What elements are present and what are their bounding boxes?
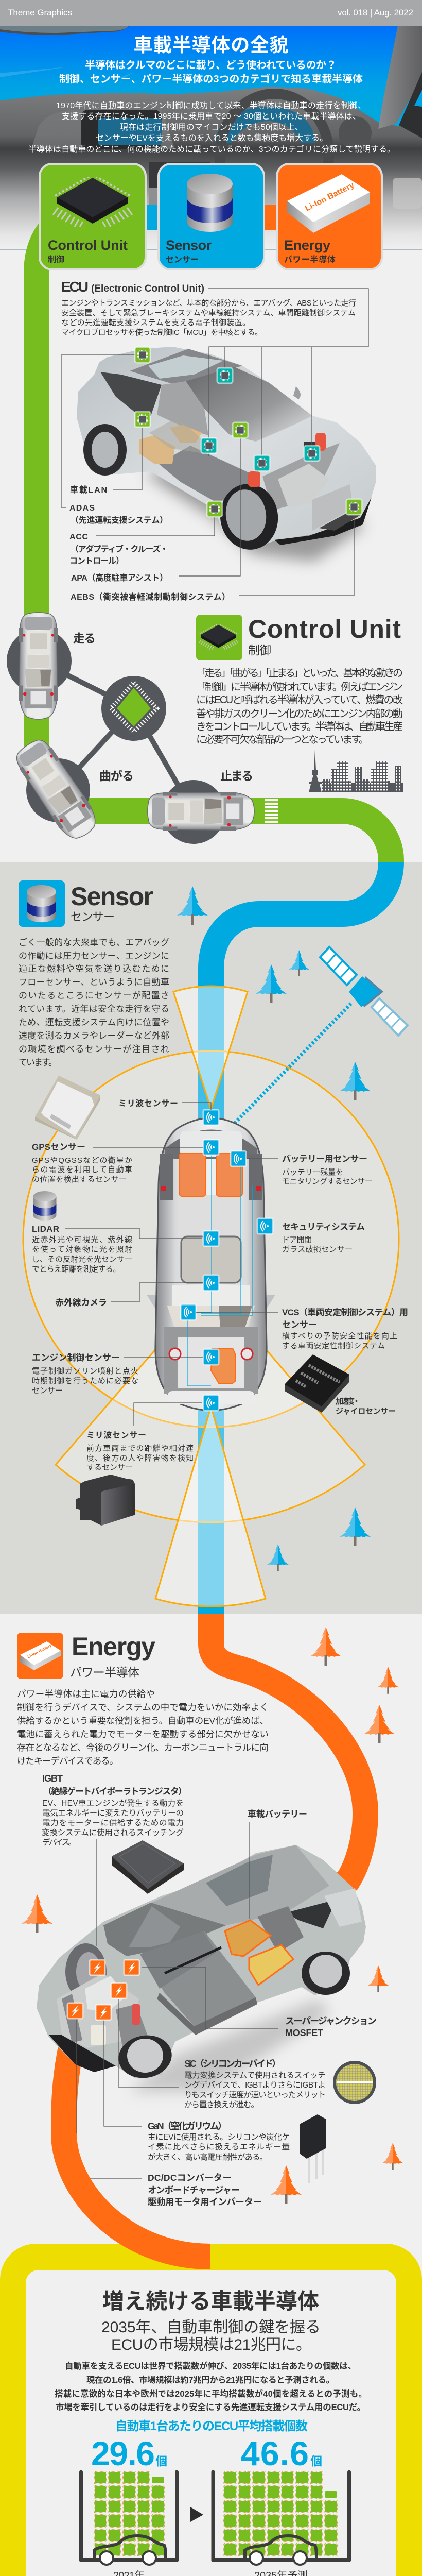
sensor text	[19, 938, 169, 1067]
sensor text: ごく一般的な大衆車でも、エアバッグ	[19, 938, 169, 947]
ECU system labels: AEBS（衝突被害軽減制動制御システム）	[71, 592, 230, 602]
label: GaN: GaN（窒化ガリウム）	[148, 2121, 227, 2131]
sensor markers	[181, 1110, 273, 1411]
energy icon: Li-Ion Battery	[27, 1643, 53, 1659]
road: green control section	[37, 217, 391, 862]
control unit text: 善や排ガスのクリーン化のためにエンジン内部の動	[196, 708, 403, 720]
subtitle	[59, 59, 363, 85]
GaN transistor	[300, 2114, 326, 2183]
ECU count value: 2021: 個	[155, 2454, 167, 2468]
label: super junction MOSFET: スーパージャンクション	[285, 2016, 377, 2026]
sensor text: ため、運転支援システム向けに位置や	[19, 1018, 169, 1027]
ECU description: マイクロプロセッサを使った制御IC「MCU」を中核とする。	[61, 328, 262, 337]
control unit icon	[196, 615, 242, 660]
category card: energy: パワー半導体	[284, 255, 336, 264]
label: SiC: 電力変換システムで使用されるスイッチ	[184, 2071, 326, 2080]
car cutaway: energy	[37, 1845, 366, 2092]
label: GPS sensor: GPSセンサー	[32, 1142, 85, 1152]
ECU description	[61, 299, 356, 337]
sensor text: の環境を調べるセンサーが注目され	[19, 1044, 169, 1054]
ECU container: 2035	[213, 2470, 349, 2565]
ECU system labels: 車載LAN	[70, 485, 107, 495]
car top view: sensor locations	[147, 1118, 275, 1411]
sensor text: れています。近年は安全な走行を守る	[19, 1004, 169, 1014]
category card: sensor	[159, 164, 264, 269]
market heading	[101, 2289, 321, 2353]
energy heading: Energy	[72, 1632, 155, 1661]
energy heading	[70, 1632, 155, 1679]
ECU heading	[61, 279, 204, 295]
label: rear millimeter wave sensor: 前方車両までの距離や相対速	[86, 1444, 194, 1453]
ECU description: 安全装置、そして緊急ブレーキシステムや車線維持システム、車間距離制御システム	[61, 308, 356, 317]
label: LiDAR: 近赤外光や可視光、紫外線	[32, 1235, 132, 1244]
connector lines: energy	[76, 1822, 278, 2178]
road links: blue and orange between cards	[146, 205, 277, 230]
sensor coverage: rear narrow fan	[155, 1406, 266, 1606]
subtitle: 制御、センサー、パワー半導体の3つのカテゴリで知る車載半導体	[59, 73, 363, 85]
header band: Theme Graphics	[8, 8, 72, 18]
market text	[55, 2361, 367, 2412]
label: battery sensor: バッテリー用センサー	[282, 1154, 367, 1164]
label: acceleration gyro sensor: 加速度・	[336, 1397, 360, 1406]
label: VCS sensor: 横すべりの予防安全性能を向上	[282, 1332, 397, 1341]
control unit text: 「制御」に半導体が使われています。例えばエンジン	[196, 681, 403, 693]
category card: energy	[277, 164, 382, 269]
label: SiC: りもスイッチ速度が速いといったメリット	[184, 2090, 326, 2099]
sensor coverage: front narrow fan	[173, 986, 248, 1109]
label: turn: 曲がる	[99, 769, 134, 783]
label: run: 走る	[73, 632, 96, 645]
label: DC/DC converter and others	[148, 2173, 262, 2207]
road: blue sensor section	[211, 862, 391, 1614]
sensor heading: センサー	[71, 910, 115, 923]
header band: vol. 018 | Aug. 2022	[338, 8, 413, 18]
label: SiC: から置き換えが進む。	[184, 2100, 259, 2109]
ECU system labels: （アダプティブ・クルーズ・	[71, 544, 168, 554]
label: IGBT: 電気エネルギーに変えたりバッテリーの	[42, 1808, 184, 1818]
sensor coverage: rear wide fan	[56, 1285, 365, 1522]
label: GaN: イ素に比べさらに扱えるエネルギー量	[148, 2142, 290, 2151]
car top view: stop	[148, 792, 254, 831]
label: battery sensor	[282, 1154, 373, 1186]
label: rear millimeter wave sensor: するセンサー	[86, 1463, 133, 1472]
car top view: turn	[11, 735, 102, 845]
label: engine control sensor: 電子制御ガソリン噴射と点火	[32, 1367, 138, 1376]
energy text: 制御を行うデバイスで、システムの中で電力をいかに効率よく	[17, 1702, 269, 1713]
energy text: 供給するかという重要な役割を担う。自動車のEV化が進めば、	[17, 1716, 269, 1726]
title: 車載半導体の全貌	[134, 35, 288, 56]
category card: energy: Li-Ion Battery	[304, 181, 356, 213]
label: security system	[282, 1222, 365, 1254]
energy text: 存在となるなど、今後のグリーン化、カーボンニュートラルに向	[17, 1742, 269, 1753]
ECU count chart title: 自動車1台あたりのECU平均搭載個数	[115, 2419, 308, 2433]
label: LiDAR: し、その反射光を光センサー	[32, 1255, 132, 1264]
radar module	[76, 1475, 135, 1526]
intro text: 支援する存在になった。1995年に乗用車で20 ～ 30個といわれた車載半導体は、	[62, 111, 361, 121]
label: GPS sensor: の位置を検出するセンサー	[32, 1175, 127, 1184]
label: battery sensor: モニタリングするセンサー	[282, 1177, 373, 1186]
label: GPS sensor: GPSやQGSSなどの衛星か	[32, 1156, 132, 1165]
SiC wafer	[333, 2061, 376, 2104]
label: GaN: 主にEVに使用される。シリコンや炭化ケ	[148, 2132, 290, 2142]
ECU description: などの先進運転支援システムを支える電子制御装置。	[61, 318, 250, 327]
growth arrow	[190, 2507, 203, 2522]
satellite	[320, 947, 408, 1036]
diagram: run turn stop network	[7, 629, 225, 844]
control unit text: 「走る」「曲がる」「止まる」といった、基本的な動きの	[196, 667, 403, 679]
label: VCS sensor: する車両安定性制御システム	[282, 1342, 385, 1350]
energy text: けたキーデバイスである。	[17, 1756, 118, 1766]
label: battery sensor: バッテリー残量を	[282, 1168, 343, 1177]
ECU system labels: ADAS	[69, 504, 95, 513]
energy icon	[17, 1633, 63, 1679]
crosswalk	[265, 800, 278, 822]
energy text	[17, 1689, 269, 1766]
sensor text: ています。	[19, 1058, 57, 1067]
label: LiDAR: LiDAR	[32, 1224, 59, 1234]
ECU count value: 2035: 個	[310, 2454, 322, 2468]
category card: sensor: Sensor	[166, 238, 212, 253]
label: IGBT: （絶縁ゲートバイポーラトランジスタ）	[43, 1786, 187, 1797]
label: IGBT: IGBT	[42, 1773, 63, 1784]
satellite signal line	[218, 1004, 351, 1140]
label: VCS sensor: VCS（車両安定制御システム）用	[282, 1308, 408, 1317]
ECU system labels: コントロール）	[69, 556, 124, 566]
control unit text: にはECUと呼ばれる半導体が入っていて、燃費の改	[196, 694, 403, 706]
label: DC/DC converter and others: DC/DCコンバーター	[148, 2173, 232, 2183]
control unit text: に必要不可欠な部品の一つとなっています。	[196, 734, 369, 745]
label: security system: ガラス破損センサー	[282, 1245, 353, 1254]
sensor text: 速度を測るカメラやレーダーなど外部	[19, 1031, 169, 1041]
label: SiC: SiC（シリコンカーバイド）	[184, 2059, 281, 2069]
intro text: センサーやEVを支えるものを入れると数も集積度も増大する。	[96, 133, 328, 143]
energy text: 電池に蓄えられた電力でモーターを駆動する部分に欠かせない	[17, 1729, 269, 1739]
sensor heading: Sensor	[71, 882, 153, 911]
category card: control unit	[40, 164, 146, 269]
label: engine control sensor: エンジン制御センサー	[32, 1353, 120, 1363]
label: DC/DC converter and others: 駆動用モータ用インバーター	[148, 2197, 262, 2207]
control unit text: きをコントロールしています。半導体は、自動車生産	[196, 721, 403, 733]
ECU chip markers	[135, 347, 362, 517]
label: LiDAR: を使って対象物に光を照射	[32, 1245, 132, 1254]
control unit heading: 制御	[248, 643, 271, 657]
car top view: run	[19, 613, 58, 719]
label: SiC: ングデバイスで、IGBTよりさらにIGBTよ	[184, 2080, 326, 2090]
label: super junction MOSFET	[285, 2016, 377, 2038]
energy heading: パワー半導体	[70, 1666, 139, 1679]
label: engine control sensor: 時期制御を行うために必要な	[32, 1377, 138, 1385]
sensor text: 適正な燃料や空気を送り込むために	[19, 964, 169, 974]
label: LiDAR	[32, 1224, 132, 1274]
sensor text: フローセンサー、というように自動車	[19, 977, 169, 987]
energy text: パワー半導体は主に電力の供給や	[17, 1689, 155, 1699]
label: super junction MOSFET: MOSFET	[285, 2028, 323, 2038]
label: LiDAR: でとらえ距離を測定する。	[32, 1265, 120, 1274]
label: acceleration gyro sensor	[336, 1397, 396, 1416]
trees: energy	[22, 1627, 403, 2204]
label: onboard battery: 車載バッテリー	[248, 1809, 307, 1819]
connector lines: ECU and labels	[61, 289, 368, 596]
GPS antenna module	[35, 1076, 100, 1140]
ECU container: 2021	[81, 2470, 177, 2565]
label: SiC	[184, 2059, 326, 2109]
label: acceleration gyro sensor: ジャイロセンサー	[336, 1407, 396, 1416]
label: rear millimeter wave sensor: 度、後方の人や障害物を検知	[86, 1454, 194, 1463]
sensor icon	[19, 880, 65, 927]
power device markers	[67, 1960, 139, 2020]
market heading: 増え続ける車載半導体	[102, 2289, 319, 2313]
hero panel: windshield view from the cockpit	[0, 26, 422, 250]
label: GPS sensor	[32, 1142, 132, 1184]
market heading: 2035年、自動車制御の鍵を握る	[101, 2319, 321, 2336]
panel: sensor background	[0, 862, 422, 1614]
LiDAR sensor icon	[33, 1191, 56, 1221]
IGBT module	[112, 1840, 184, 1894]
label: rear millimeter wave sensor	[86, 1431, 194, 1472]
label: DC/DC converter and others: オンボードチャージャー	[148, 2185, 240, 2195]
label: rear millimeter wave sensor: ミリ波センサー	[86, 1431, 146, 1440]
ECU system labels: （先進運転支援システム）	[71, 515, 168, 525]
market text: 搭載に意欲的な日本や欧州では2025年に平均搭載数が40個を超えるとの予測も。	[55, 2388, 367, 2399]
intro text: 現在は走行制御用のマイコンだけでも50個以上、	[120, 123, 303, 132]
subtitle: 半導体はクルマのどこに載り、どう使われているのか？	[85, 59, 337, 71]
panel: yellow market frame	[0, 2133, 422, 2576]
ECU system labels	[69, 485, 230, 602]
label: security system: ドア開閉	[282, 1235, 312, 1244]
label: infrared camera: 赤外線カメラ	[55, 1298, 107, 1308]
intro text: 1970年代に自動車のエンジン制御に成功して以来、半導体は自動車の走行を制御、	[56, 100, 366, 110]
label: GaN	[148, 2121, 290, 2162]
label: VCS sensor: センサー	[282, 1320, 317, 1330]
label: stop: 止まる	[220, 769, 253, 783]
trees: sensor	[177, 886, 371, 1571]
sensor text: の作動には圧力センサー、エンジンに	[19, 951, 169, 961]
label: engine control sensor	[32, 1353, 138, 1395]
label: IGBT: デバイス。	[42, 1837, 76, 1847]
control unit text	[196, 667, 403, 745]
label: GaN: が大きく、高い高電圧耐性がある。	[148, 2153, 268, 2162]
car cutaway: control unit	[77, 347, 376, 562]
ECU heading: (Electronic Control Unit)	[91, 283, 204, 294]
header band	[0, 0, 422, 26]
panel: energy road	[64, 1614, 365, 2257]
intro text	[28, 100, 395, 154]
category card: control unit: Control Unit	[48, 238, 128, 253]
sensor text: のいたるところにセンサーが配置さ	[19, 991, 169, 1001]
label: VCS sensor	[282, 1308, 408, 1350]
ECU system labels: ACC	[69, 533, 88, 541]
ECU description: エンジンやトランスミッションなど、基本的な部分から、エアバッグ、ABSといった走行	[61, 299, 356, 308]
label: IGBT	[42, 1773, 187, 1847]
control unit heading	[248, 615, 401, 657]
connector lines: sensors	[65, 1103, 278, 1426]
city skyline	[309, 750, 403, 792]
market text: 自動車を支えるECUは世界で搭載数が伸び、2035年には1台あたりの個数は、	[65, 2361, 356, 2371]
ECU heading: ECU	[61, 279, 89, 295]
ECU count value: 2021: 29.6	[91, 2434, 155, 2472]
label: engine control sensor: センサー	[32, 1386, 63, 1395]
acceleration gyro chip	[285, 1354, 349, 1413]
market text: 市場を牽引しているのは走行をより安全にする先進運転支援システム用のECUだ。	[56, 2402, 365, 2412]
category card: control unit: 制御	[48, 255, 64, 264]
category card: sensor: センサー	[166, 255, 199, 264]
market heading: ECUの市場規模は21兆円に。	[111, 2336, 311, 2353]
ECU count value: 2035: 46.6	[241, 2434, 309, 2472]
control unit heading: Control Unit	[248, 615, 401, 643]
label: GPS sensor: らの電波を利用して自動車	[32, 1165, 132, 1174]
sensor coverage circle	[23, 1051, 399, 1427]
label: IGBT: 変換システムに使用されるスイッチング	[42, 1828, 184, 1837]
label: IGBT: EV、HEV車エンジンが発生する動力を	[42, 1799, 184, 1808]
label: millimeter wave sensor: ミリ波センサー	[118, 1099, 178, 1108]
category card: energy: Energy	[284, 238, 330, 253]
label: IGBT: 電力をモーターに供給するための電力	[42, 1818, 184, 1827]
intro text: 半導体は自動車のどこに、何の機能のために載っているのか、3つのカテゴリに分類して説明する。	[28, 144, 395, 154]
ECU system labels: APA（高度駐車アシスト）	[71, 573, 168, 583]
label: security system: セキュリティシステム	[282, 1222, 365, 1232]
market text: 現在の1.6倍、市場規模は約7兆円から21兆円になると予測される。	[86, 2375, 335, 2385]
